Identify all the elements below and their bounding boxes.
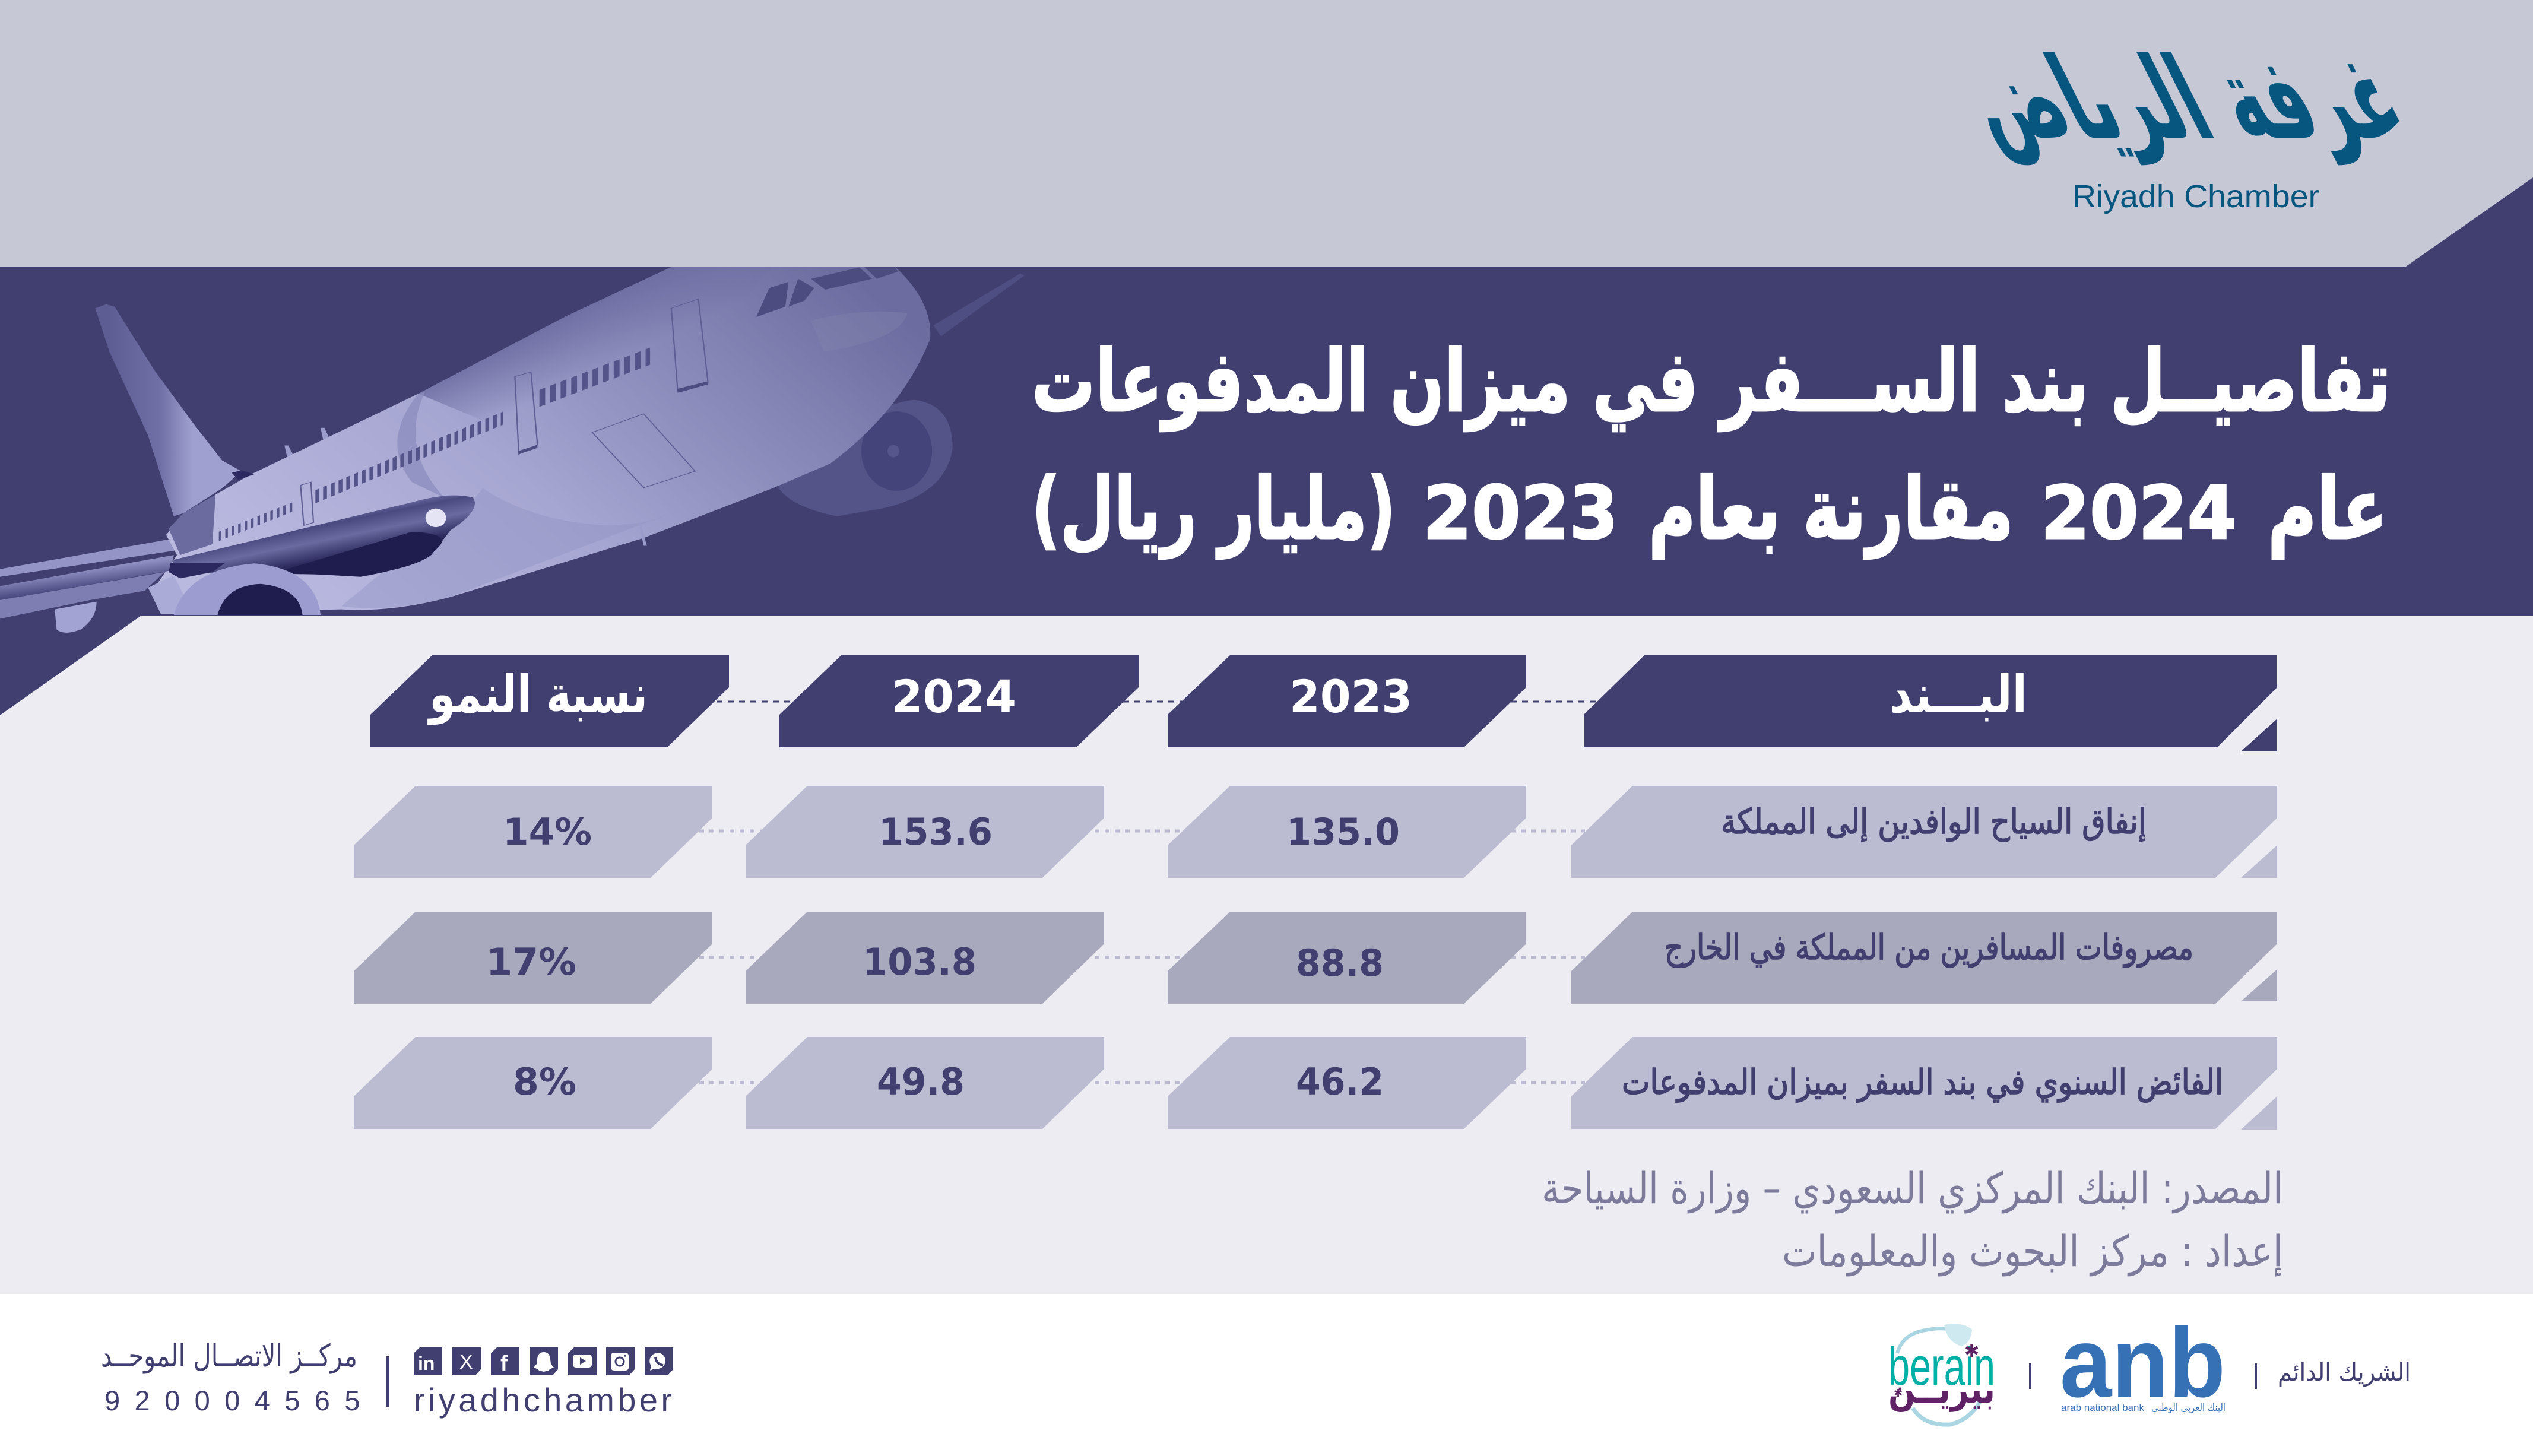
row 1 value 2023 [1168,786,1526,878]
row 2 value 2023: 88.8 [1296,941,1384,985]
icon: facebook: f [500,1351,508,1375]
row 3 value 2024 [746,1037,1104,1129]
logo english wordmark: Riyadh Chamber [2072,179,2319,214]
source line: المصدر: البنك المركزي السعودي – وزارة السياحة [1542,1163,2283,1214]
icon: snapchat [530,1347,558,1375]
header: 2024 [779,655,1139,747]
row 1 [354,786,2277,878]
row 3 label [1571,1037,2277,1130]
logo: Riyadh Chamber [1938,33,2429,214]
row 2 growth: 17% [486,940,576,984]
website handle: riyadhchamber [414,1381,672,1419]
row 2 value 2024: 103.8 [863,940,977,984]
title line 2: 2024 [2041,471,2236,556]
contact center label: مركــز الاتصــال الموحــد [101,1338,357,1374]
row 2 label: مصروفات المسافرين من المملكة في الخارج [1665,927,2193,968]
row 2 value 2023 [1168,912,1526,1004]
row 1 value 2023: 135.0 [1286,810,1400,854]
title [1032,332,2391,559]
row 1 growth [354,786,712,878]
title line 2: (مليار ريال) [1032,459,1396,559]
title line 2: عام [2268,459,2388,559]
header: item: البـــند [1890,664,2027,725]
partner logo: berain [1888,1324,1995,1425]
icon: instagram [606,1347,635,1375]
row 3 value 2023: 46.2 [1296,1060,1384,1103]
row 3 label: الفائض السنوي في بند السفر بميزان المدفوعات [1622,1062,2223,1103]
row 2 growth [354,912,712,1004]
table [354,655,2277,1130]
phone number: 920004565 [104,1385,375,1416]
row 2 [354,912,2277,1004]
partner divider left [2029,1363,2031,1389]
header: item [1584,655,2277,751]
icon: linkedin: in [418,1353,435,1374]
social icons [414,1347,673,1375]
icon: x [452,1347,481,1375]
title line 2 [1032,459,2388,559]
prepared by line: إعداد : مركز البحوث والمعلومات [1782,1226,2283,1277]
partner logo: anb: arab national bank [2061,1402,2144,1413]
row 1 value 2024: 153.6 [879,810,993,854]
header: 2023: 2023 [1289,670,1412,723]
footer [0,1294,2533,1456]
row 1 growth: 14% [503,810,592,854]
partner logo: anb: البنك العربي الوطني [2151,1402,2226,1414]
source note [1542,1163,2283,1277]
partner logo: anb: anb [2060,1308,2226,1418]
header: 2023 [1168,655,1526,747]
row 1 label [1571,786,2277,878]
illustration: airplane [0,267,1025,633]
row 3 value 2023 [1168,1037,1526,1129]
permanent partner label: الشريك الدائم [2278,1357,2411,1387]
icon: x: X [459,1351,473,1373]
header: 2024: 2024 [892,670,1016,723]
title line 2: 2023 [1423,471,1618,556]
row 3 value 2024: 49.8 [877,1060,965,1103]
row 1 value 2024 [746,786,1104,878]
title banner [0,177,2533,715]
icon: facebook [491,1347,519,1375]
partner logo: berain: بيريــن [1888,1366,1995,1412]
row 3 [354,1037,2277,1130]
header: growth rate [370,655,729,747]
row connector lines [699,831,1585,1083]
row 1 label: إنفاق السياح الوافدين إلى المملكة [1721,801,2147,842]
icon: whatsapp [645,1347,673,1375]
row 2 value 2024 [746,912,1104,1004]
icon: youtube [568,1347,597,1375]
header connector lines [717,700,1597,703]
footer divider [386,1356,389,1407]
icon: linkedin [414,1347,442,1375]
partner divider right [2255,1363,2257,1389]
partner logo: berain: berain [1888,1337,1995,1397]
row 3 growth: 8% [513,1060,576,1103]
partner logo: berain: ✱ [1894,1387,1903,1400]
partner logo: berain: ✱ [1964,1341,1979,1362]
title line 2: مقارنة بعام [1648,459,2014,559]
contact center [101,1338,375,1416]
top header band [0,0,2533,267]
row 3 growth [354,1037,712,1129]
row 2 label [1571,912,2277,1004]
header: growth rate: نسبة النمو [427,664,648,725]
